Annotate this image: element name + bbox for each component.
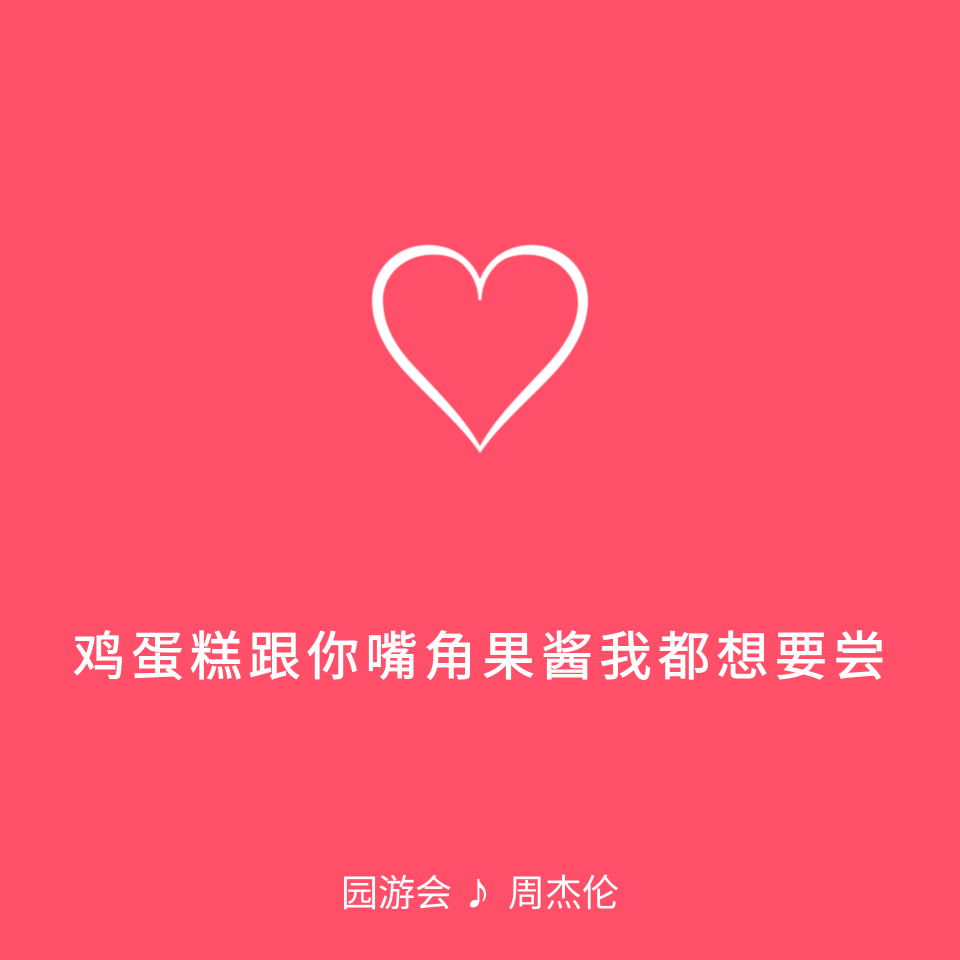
credit: song and artist: ♪	[465, 862, 491, 920]
credit: song and artist: 周杰伦	[508, 873, 619, 914]
lyric text: 鸡蛋糕跟你嘴角果酱我都想要尝	[73, 629, 892, 687]
credit: song and artist	[341, 862, 619, 920]
credit: song and artist: 园游会	[341, 873, 452, 914]
icon: heart outline	[371, 244, 589, 454]
